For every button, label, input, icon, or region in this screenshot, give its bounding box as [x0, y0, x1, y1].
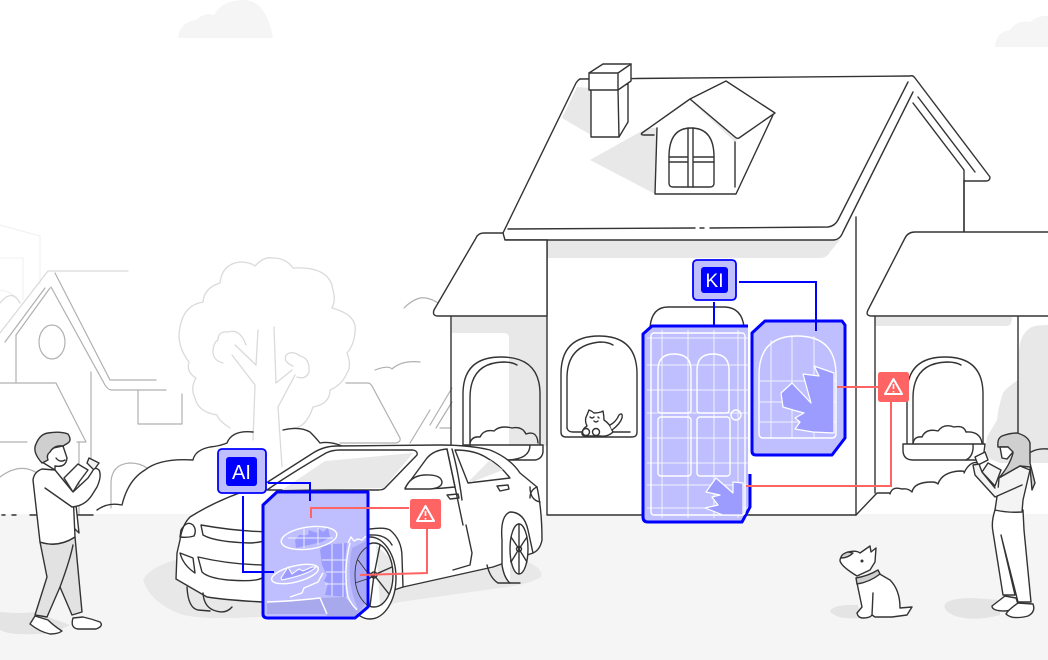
background house left	[0, 271, 182, 515]
left wing roof	[434, 233, 547, 316]
woman upper arm	[982, 463, 1001, 486]
man arm	[45, 468, 100, 507]
cat	[582, 410, 622, 436]
background bushes	[2, 428, 342, 515]
woman hair	[998, 433, 1035, 490]
AI badge: AI	[232, 462, 251, 484]
man head	[42, 446, 67, 470]
roof shadows	[562, 87, 739, 194]
man torso	[33, 469, 75, 544]
woman shoes	[992, 596, 1018, 611]
cloud left	[178, 0, 273, 38]
right wing roof	[867, 232, 1048, 316]
car lights	[180, 523, 195, 537]
dog head	[840, 546, 876, 576]
dog shadow	[830, 605, 860, 618]
door panels	[658, 354, 729, 413]
door lintel	[650, 307, 744, 327]
wheel trace	[355, 547, 367, 605]
door damage	[705, 478, 743, 515]
background faint house	[0, 225, 40, 303]
panel: door inspection	[643, 326, 750, 522]
car wheel arches and wheels	[370, 528, 403, 587]
lower headlight	[270, 560, 320, 588]
house shadows	[452, 240, 1048, 463]
car	[176, 445, 542, 619]
main roof	[502, 76, 990, 240]
fender crack	[267, 536, 366, 614]
foreground bush right	[890, 462, 980, 494]
fender damage	[320, 543, 347, 597]
door frame	[651, 333, 745, 515]
wheel shade	[350, 541, 366, 609]
chimney	[589, 64, 631, 137]
door grid	[647, 330, 748, 518]
woman shadow	[944, 598, 1000, 619]
man shadow	[0, 612, 70, 634]
man shirt hem	[69, 503, 79, 533]
woman legs	[992, 510, 1031, 602]
woman phone	[975, 452, 988, 465]
woman arm	[973, 464, 1022, 497]
car front tyre	[187, 587, 232, 612]
dog body	[857, 573, 912, 618]
KI badge	[693, 260, 736, 300]
window frame and grid	[759, 336, 836, 438]
dormer window	[669, 128, 714, 187]
panel: window inspection	[752, 321, 845, 455]
AI badge	[218, 449, 266, 493]
man phone	[87, 458, 99, 470]
connector: house alert lines	[746, 387, 891, 486]
man legs	[35, 537, 82, 617]
woman torso	[995, 466, 1030, 512]
connector: car alert lines	[311, 508, 427, 575]
car mirror	[405, 475, 442, 489]
background house right	[340, 298, 452, 443]
dog collar	[856, 570, 880, 584]
dog	[830, 546, 912, 618]
right bush behind woman	[1031, 449, 1048, 452]
woman with phone	[944, 433, 1035, 619]
right wing window	[903, 357, 985, 460]
ground	[0, 514, 1048, 660]
central window with cat	[561, 336, 637, 437]
dormer	[641, 81, 775, 194]
man shoes	[30, 616, 62, 634]
woman face	[1000, 447, 1013, 459]
icon: warning car	[410, 499, 441, 529]
upper headlight	[280, 523, 338, 553]
cloud right	[995, 16, 1048, 47]
tyre shade	[320, 597, 366, 616]
car panel lower band	[267, 598, 327, 614]
car shadow	[143, 558, 542, 618]
icon: warning house	[878, 372, 909, 402]
KI badge: KI	[706, 271, 723, 292]
main house walls	[451, 180, 1018, 515]
car windshield	[267, 450, 417, 490]
panel: car inspection	[263, 492, 368, 618]
connector: KI lines	[714, 282, 816, 331]
man with phone	[0, 432, 101, 634]
background tree	[179, 258, 355, 467]
man upper arm	[64, 464, 88, 492]
left wing window	[463, 357, 543, 460]
window damage	[781, 366, 834, 433]
connector: AI lines	[243, 483, 310, 572]
